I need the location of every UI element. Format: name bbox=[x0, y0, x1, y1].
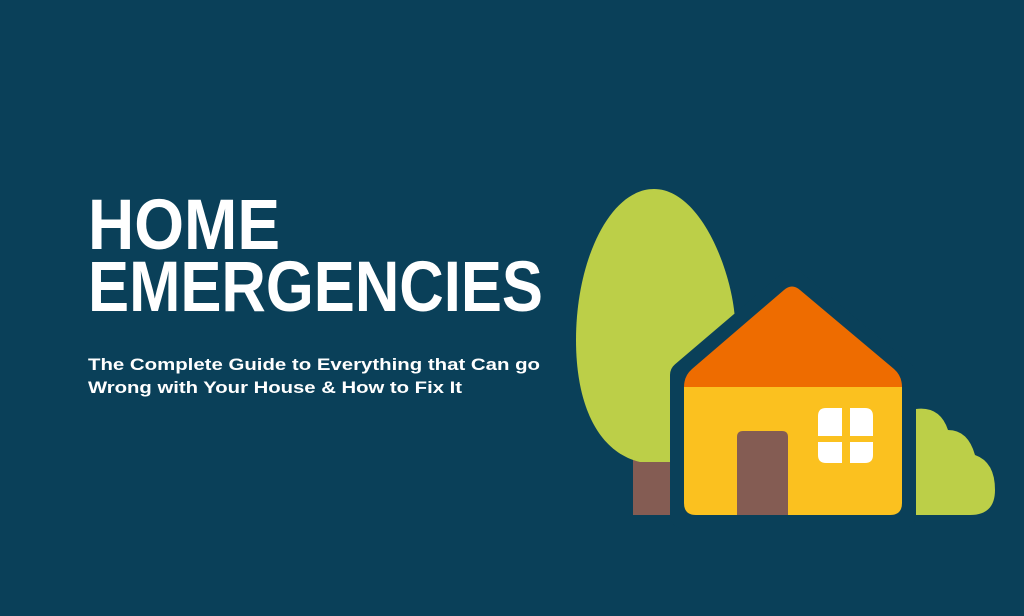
icon: tree bbox=[576, 189, 735, 515]
icon: bush bbox=[916, 409, 995, 515]
title: HOME bbox=[88, 186, 280, 265]
icon: house bbox=[684, 286, 902, 515]
subtitle: Wrong with Your House & How to Fix It bbox=[88, 378, 462, 397]
title bbox=[88, 186, 543, 327]
title: EMERGENCIES bbox=[88, 248, 543, 327]
illustration: tree, house and bush bbox=[576, 189, 995, 515]
subtitle: The Complete Guide to Everything that Can go bbox=[88, 355, 540, 374]
subtitle bbox=[88, 355, 540, 397]
house cut-out outline bbox=[684, 283, 902, 515]
